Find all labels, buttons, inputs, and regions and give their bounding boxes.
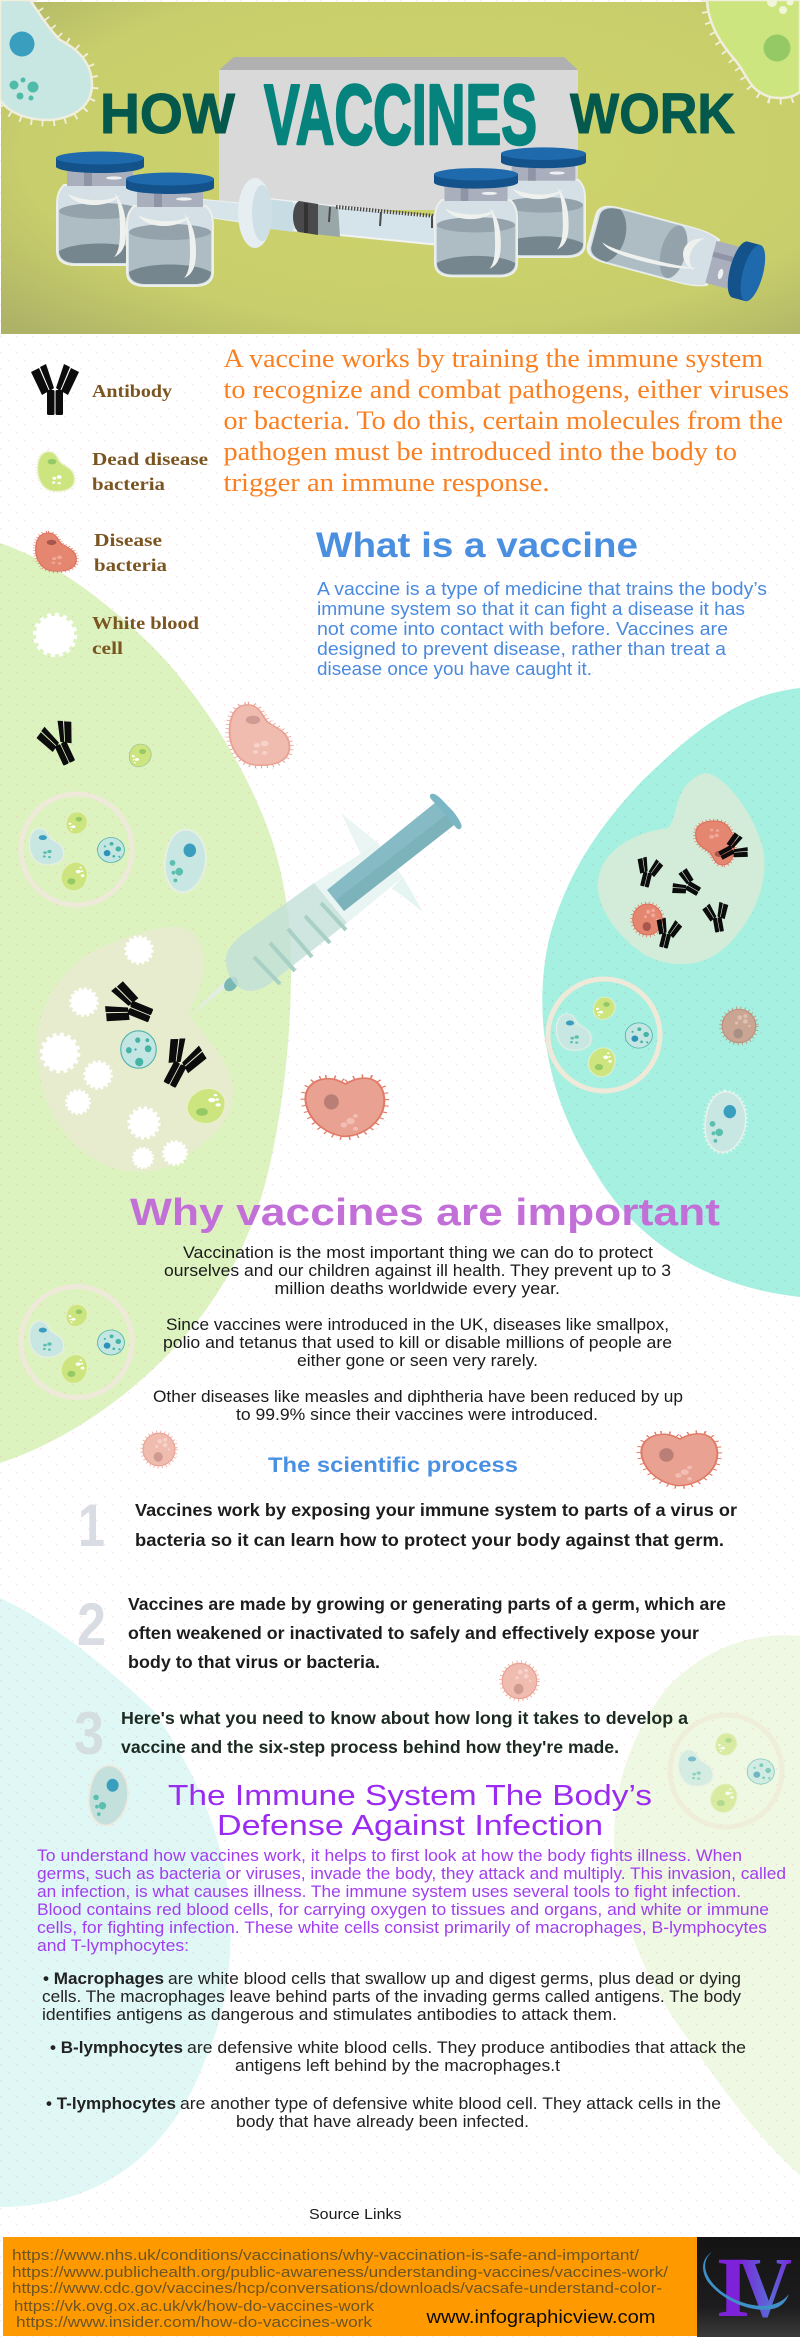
vial: front left — [126, 172, 214, 286]
background blob: upper left green — [0, 543, 291, 1463]
icon: teal cell, banner top left — [0, 0, 92, 120]
number 2: 2 — [77, 1591, 106, 1658]
panel: hero banner — [0, 0, 800, 334]
step 2 — [77, 1591, 726, 1672]
icon: green cell, banner top right — [707, 0, 800, 98]
text: importance of vaccination: Vaccination is the most important thing we can do to protect — [183, 1244, 653, 1262]
icon: teal cell — [705, 1092, 746, 1152]
heading: what is a vaccine: What is a vaccine — [316, 526, 638, 565]
step 1 text — [135, 1500, 737, 1550]
source link list: https://www.insider.com/how-do-vaccines-work — [16, 2314, 373, 2331]
text: macrophages: identifies antigens as dangerous and stimulates antibodies to attack them. — [42, 2006, 617, 2024]
intro paragraph: A vaccine works by training the immune system — [224, 344, 763, 373]
group: circled cells — [548, 979, 660, 1091]
logo: I — [716, 2239, 750, 2335]
icon: disease bacteria — [633, 904, 662, 935]
text: t-lymphocytes: body that have already been infected. — [236, 2113, 529, 2131]
step 2 text: body to that virus or bacteria. — [128, 1652, 380, 1672]
illustration: right body region — [548, 773, 765, 1152]
syringe lying down — [199, 178, 440, 248]
panel: footer — [3, 2237, 800, 2337]
text: b-lymphocytes: • B-lymphocytes — [50, 2039, 183, 2057]
icon: antibody — [31, 364, 79, 415]
intro paragraph: or bacteria. To do this, certain molecules from the — [224, 406, 783, 435]
legend label: white blood cell: White blood — [92, 613, 199, 633]
legend label: antibody: Antibody — [92, 381, 172, 401]
text: b-lymphocytes: antigens left behind by the macrophages.t — [235, 2057, 560, 2075]
background blob: lower left pale teal — [0, 1598, 231, 2207]
intro paragraph: pathogen must be introduced into the body to — [224, 437, 737, 466]
icon: disease bacteria — [696, 821, 734, 865]
text: immune system explanation: germs, such as bacteria or viruses, invade the body, they attack and multiply. This invasion, called — [37, 1865, 786, 1883]
text: immune system explanation: an infection, is what causes illness. The immune system uses several tools to fight infection. — [37, 1883, 741, 1901]
logo — [697, 2237, 800, 2337]
title: VACCINES — [264, 68, 537, 163]
intro paragraph — [224, 344, 789, 497]
source link list: https://www.nhs.uk/conditions/vaccinations/why-vaccination-is-safe-and-important/ — [12, 2247, 640, 2264]
text: what is a vaccine: not come into contact with before. Vaccines are — [317, 618, 728, 639]
heading: why vaccines are important: Why vaccines are important — [130, 1192, 720, 1234]
step 3 text: Here's what you need to know about how long it takes to develop a — [121, 1708, 688, 1728]
legend label: white blood cell — [92, 613, 199, 658]
text: immune system explanation: cells, for fighting infection. These white cells consist primarily of macrophages, B-lymphocytes — [37, 1919, 767, 1937]
text: b-lymphocytes — [50, 2039, 746, 2075]
icon: disease bacteria heart — [305, 1078, 384, 1136]
step 3 text: vaccine and the six-step process behind how they're made. — [121, 1737, 619, 1757]
text: immune system explanation: Blood contains red blood cells, for carrying oxygen to tissues and organs, and white or immune — [37, 1901, 769, 1919]
logo: V — [738, 2239, 792, 2335]
legend label: dead disease bacteria: Dead disease — [92, 449, 208, 469]
text: immune system explanation — [37, 1847, 786, 1955]
text: t-lymphocytes: are another type of defensive white blood cell. They attack cells in the — [180, 2095, 721, 2113]
title: HOW — [100, 82, 235, 146]
intro paragraph: trigger an immune response. — [224, 468, 550, 497]
text: immune system explanation: and T-lymphocytes: — [37, 1937, 189, 1955]
step 3 text — [121, 1708, 688, 1757]
number 1: 1 — [78, 1492, 105, 1559]
number 3: 3 — [74, 1700, 104, 1767]
vial: back left — [56, 152, 144, 265]
text: importance of vaccination: Since vaccines were introduced in the UK, diseases like smallpox, — [166, 1316, 669, 1334]
vial: fallen — [585, 202, 770, 304]
legend label: disease bacteria: bacteria — [94, 555, 167, 575]
step 2 text — [128, 1594, 726, 1672]
icon: pale disease bacteria — [230, 705, 289, 765]
text: b-lymphocytes: are defensive white blood cells. They produce antibodies that attack the — [187, 2039, 746, 2057]
title: WORK — [570, 82, 735, 146]
icon: dead disease bacteria — [38, 452, 74, 491]
step 1 — [78, 1492, 737, 1559]
text: what is a vaccine: immune system so that it can fight a disease it has — [317, 598, 745, 619]
text: what is a vaccine: A vaccine is a type of medicine that trains the body’s — [317, 578, 767, 599]
text: what is a vaccine: disease once you have caught it. — [317, 658, 592, 679]
legend label: disease bacteria: Disease — [94, 530, 162, 550]
white blood cells — [41, 936, 187, 1168]
step 1 text: Vaccines work by exposing your immune system to parts of a virus or — [135, 1500, 737, 1520]
icon: antibody — [151, 1032, 210, 1094]
illustration: syringe — [188, 794, 462, 1018]
text: importance of vaccination: to 99.9% since their vaccines were introduced. — [236, 1406, 598, 1424]
source link list: https://vk.ovg.ox.ac.uk/vk/how-do-vaccines-work — [14, 2298, 375, 2315]
legend label: dead disease bacteria — [92, 449, 208, 494]
icon: antibody — [100, 979, 159, 1036]
icon: brown cell — [722, 1009, 756, 1043]
icon: disease bacteria — [36, 533, 76, 571]
text: macrophages — [42, 1970, 742, 2024]
icon: bacteria heart — [641, 1434, 717, 1486]
group: circled cells — [21, 794, 132, 905]
macrophage blob with antibodies — [598, 773, 765, 964]
panel: legend — [31, 364, 208, 658]
step 2 text: Vaccines are made by growing or generating parts of a germ, which are — [128, 1594, 726, 1614]
text: what is a vaccine: designed to prevent disease, rather than treat a — [317, 638, 727, 659]
background blob: right teal — [542, 688, 800, 1297]
text: macrophages: are white blood cells that swallow up and digest germs, plus dead or dying — [168, 1970, 741, 1988]
website url: www.infographicview.com — [425, 2307, 656, 2327]
legend label: dead disease bacteria: bacteria — [92, 474, 165, 494]
text: importance of vaccination: million deaths worldwide every year. — [274, 1280, 560, 1298]
title — [100, 68, 735, 163]
background blob: lower right pale green — [614, 1635, 800, 2175]
icon: antibody — [34, 716, 87, 771]
heading: the scientific process: The scientific process — [268, 1454, 518, 1477]
icon: teal round cell — [121, 1031, 156, 1068]
vial: back right — [501, 147, 586, 257]
heading: the immune system: The Immune System The Body’s — [168, 1780, 652, 1812]
heading: the immune system — [168, 1780, 652, 1842]
text: t-lymphocytes — [46, 2095, 721, 2131]
source link list — [12, 2247, 669, 2331]
text: t-lymphocytes: • T-lymphocytes — [46, 2095, 176, 2113]
legend label: white blood cell: cell — [92, 638, 123, 658]
step 3 — [74, 1700, 688, 1767]
macrophage blob — [37, 927, 233, 1172]
text: immune system explanation: To understand how vaccines work, it helps to first look at how the body fights illness. When — [37, 1847, 742, 1865]
heading: source links: Source Links — [309, 2206, 402, 2223]
icon: pale round bacteria — [143, 1433, 175, 1466]
text: importance of vaccination — [153, 1244, 683, 1424]
icon: dead bacteria — [129, 744, 151, 767]
antibodies — [632, 830, 752, 951]
icon: pale round bacteria — [502, 1663, 537, 1699]
icon: teal cell — [165, 830, 206, 892]
illustration: left body region — [21, 705, 384, 1172]
group: circled cells, faded — [670, 1715, 782, 1827]
icon: teal cell — [89, 1766, 128, 1825]
source link list: https://www.cdc.gov/vaccines/hcp/conversations/downloads/vacsafe-understand-color- — [12, 2280, 662, 2297]
icon: green cell — [187, 1089, 225, 1123]
text: importance of vaccination: ourselves and our children against ill health. They prevent up to 3 — [164, 1262, 671, 1280]
text: what is a vaccine — [317, 578, 767, 679]
intro paragraph: to recognize and combat pathogens, either viruses — [224, 375, 789, 404]
group: circled cells — [21, 1286, 132, 1398]
vaccine box — [219, 57, 578, 210]
step 2 text: often weakened or inactivated to safely and effectively expose your — [128, 1623, 699, 1643]
step 1 text: bacteria so it can learn how to protect your body against that germ. — [135, 1530, 724, 1550]
text: macrophages: • Macrophages — [43, 1970, 164, 1988]
heading: the immune system: Defense Against Infection — [217, 1810, 603, 1842]
text: importance of vaccination: polio and tetanus that used to kill or disable millions of people are — [163, 1334, 672, 1352]
legend label: disease bacteria — [94, 530, 167, 575]
icon: white blood cell — [35, 615, 75, 655]
source link list: https://www.publichealth.org/public-awareness/understanding-vaccines/vaccines-work/ — [12, 2264, 669, 2281]
vial: front right — [434, 168, 518, 276]
text: macrophages: cells. The macrophages leave behind parts of the invading germs called antigens. The body — [42, 1988, 742, 2006]
text: importance of vaccination: Other diseases like measles and diphtheria have been reduced by up — [153, 1388, 683, 1406]
text: importance of vaccination: either gone or seen very rarely. — [297, 1352, 538, 1370]
